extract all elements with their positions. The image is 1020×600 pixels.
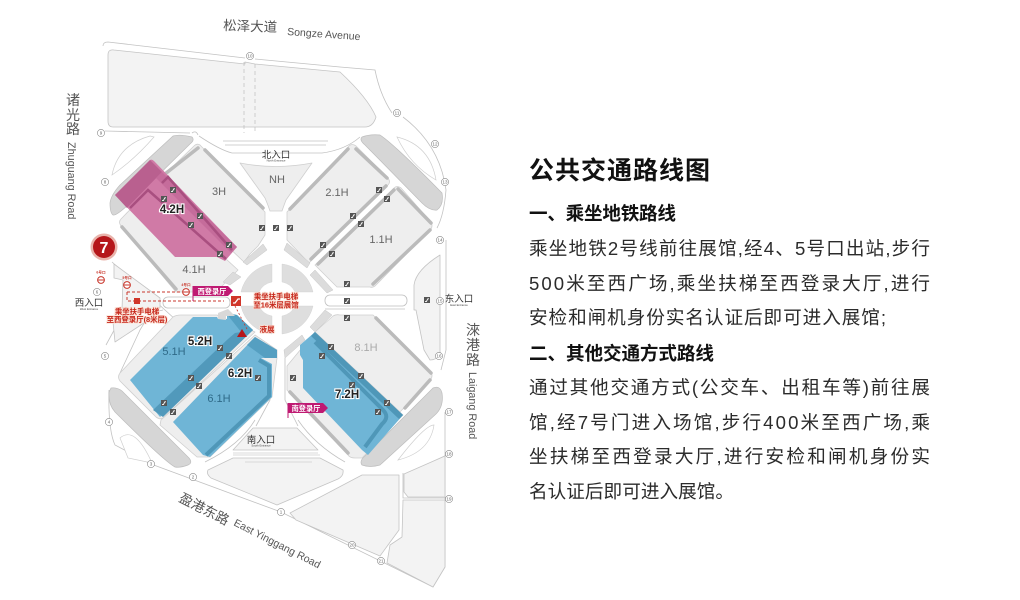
gate numbers: 6 [96,290,99,295]
entrance labels: South Entrance [251,444,271,448]
section heading: other transport: 二、其他交通方式路线 [529,343,714,364]
road names: Zhuguang Road [65,142,77,219]
route caption west: 至西登录厅(8米层) [107,315,168,324]
road names [65,18,480,571]
east corridor [325,295,407,306]
gate numbers: 19 [446,497,452,502]
red escalator icons [134,296,241,306]
section body: metro: 乘坐地铁2号线前往展馆,经4、5号口出站,步行 [529,238,930,259]
route caption centre: 乘坐扶手电梯 [254,292,299,301]
section heading: metro: 一、乘坐地铁路线 [529,203,676,224]
gate 7 marker: 7 [100,240,109,257]
section body: other transport: 坐扶梯至西登录大厅,进行安检和闸机身份实 [529,446,930,467]
south lobby flag: 南登录厅 [292,404,320,413]
gate numbers: 5 [104,354,107,359]
gate numbers: 2 [192,475,195,480]
entrance labels: 东入口 [445,293,473,305]
entrance labels: North Entrance [267,158,286,162]
gate numbers: 14 [437,238,443,243]
hall 3H: 3H [212,186,226,198]
hall 8.1H: 8.1H [354,342,378,354]
south lobby flag [288,403,328,418]
road names: 路 [466,352,480,368]
gate numbers: 13 [442,180,448,185]
west lobby flag [193,286,233,301]
gate 7 marker [90,234,118,260]
road names: 松泽大道 [223,18,277,35]
metro exit 5: 5号口 [122,275,132,280]
gate numbers: 17 [446,410,452,415]
gate numbers: 21 [378,559,384,564]
hall 6 base and highlighted 6.1H and 6.2H: 6.1H [207,393,231,405]
route caption centre: 至16米层展馆 [253,300,299,310]
north parking lot [108,50,376,127]
gate numbers: 11 [395,111,400,116]
gate numbers: 16 [436,354,442,359]
entrance labels: 南入口 [247,434,275,446]
metro exit 5 [122,275,132,288]
venue map [65,18,480,587]
road names: Songze Avenue [287,26,361,43]
route caption west: 乘坐扶手电梯 [115,307,160,316]
hall NH [240,163,312,211]
hall 5 base and highlighted 5.1H and 5.2H: 5.2H [188,336,212,348]
site roads and boundary [103,42,449,587]
hall 7 base and highlighted 7.2H [287,332,403,458]
gate numbers: 20 [349,543,355,548]
entrance labels [75,150,473,448]
hall 1.1H: 1.1H [369,234,393,246]
gate numbers: 18 [446,452,452,457]
road names: 路 [66,121,80,137]
title: 公共交通路线图 [529,157,710,185]
south entrance block [233,428,318,450]
metro exit 6: 6号口 [96,270,106,274]
gate numbers: 10 [247,54,253,59]
section body: metro [529,238,930,328]
road names: East Yinggang Road [232,517,323,571]
road names: 港 [466,337,480,353]
section body: other transport: 名认证后即可进入展馆。 [529,481,734,502]
road names: 光 [66,107,80,123]
route description text [529,157,930,502]
route caption centre [253,292,299,310]
road names: Laigang Road [466,372,478,439]
gate numbers: 12 [432,142,438,147]
central plaza [163,243,407,358]
hall 1.1H [315,186,432,287]
hall 2.1H: 2.1H [325,187,349,199]
hall 5 base and highlighted 5.1H and 5.2H [118,313,255,419]
escalator icons [161,187,430,415]
hall 6 base and highlighted 6.1H and 6.2H: 6.2H [228,368,252,380]
hall 4.1H [120,189,238,292]
side lots [414,255,440,360]
entrance labels: 北入口 [262,150,290,161]
road names: 诸 [66,92,80,108]
entrance labels: West Entrance [80,307,99,311]
gate numbers [93,52,453,565]
gate numbers: 15 [437,299,443,304]
highlighted hall 4.2H: 4.2H [160,204,184,216]
hall 4.1H: 4.1H [182,264,206,276]
entrance labels: 西入口 [75,298,103,309]
hall NH: NH [269,174,285,186]
hall 2.1H [287,144,390,263]
gate numbers: 3 [150,462,153,467]
route caption west [107,307,168,324]
gray corner lozenges [109,135,442,467]
south parking lots [207,458,343,505]
section body: other transport: 馆,经7号门进入场馆,步行400米至西广场,乘 [529,412,930,433]
metro exit 4 [181,282,191,295]
west corridor [163,297,230,308]
hall 8.1H [315,315,432,412]
road names: 淶 [466,322,480,338]
highlighted hall 4.2H [115,160,237,261]
hall 3H [160,144,265,262]
metro exit 4: 4号口 [181,282,191,287]
road names: 盈港东路 [177,490,232,528]
gate numbers: 8 [104,180,107,185]
hall 5 base and highlighted 5.1H and 5.2H: 5.1H [162,346,186,358]
section body: metro: 安检和闸机身份实名认证后即可进入展馆; [529,307,886,328]
entrance labels: East Entrance [450,303,468,307]
hall 6 base and highlighted 6.1H and 6.2H [160,335,277,457]
west lobby flag: 西登录厅 [198,287,226,296]
metro route [96,270,299,337]
section body: other transport [529,377,930,502]
metro exit 6 [96,270,106,283]
section body: metro: 500米至西广场,乘坐扶梯至西登录大厅,进行 [529,273,930,294]
route caption plaza: 液展 [260,325,275,334]
gate numbers: 9 [100,131,103,136]
section body: other transport: 通过其他交通方式(公交车、出租车等)前往展 [529,377,930,398]
gate numbers: 1 [280,510,283,515]
gate numbers: 4 [108,420,111,425]
hall 7 base and highlighted 7.2H: 7.2H [335,389,359,401]
